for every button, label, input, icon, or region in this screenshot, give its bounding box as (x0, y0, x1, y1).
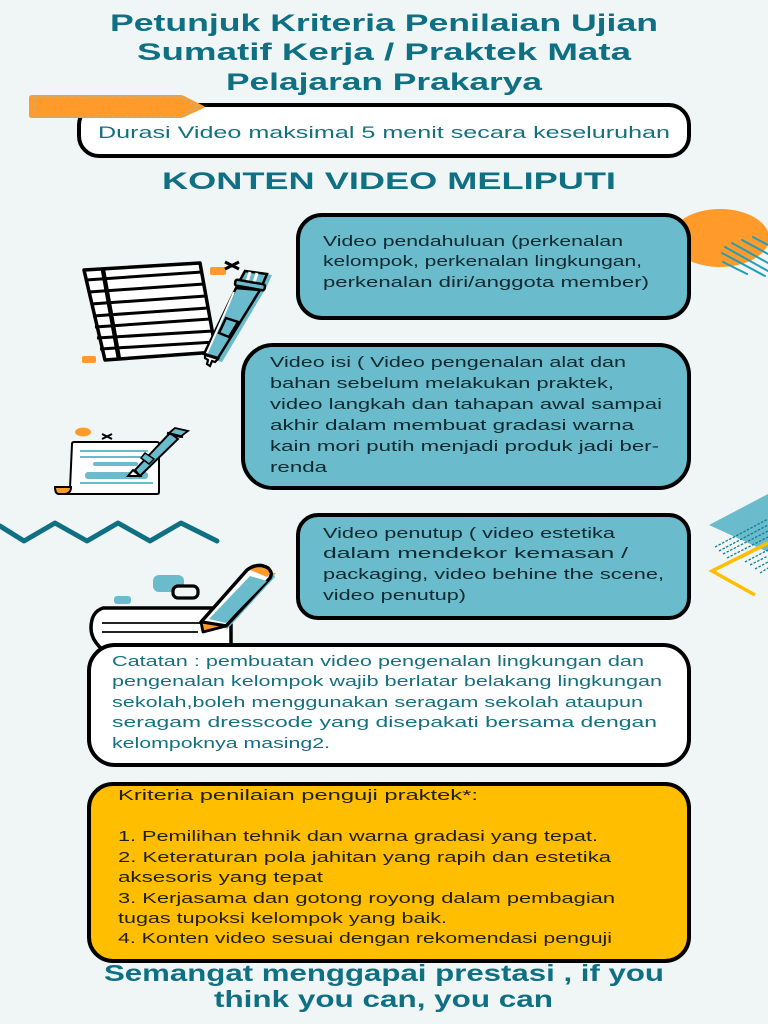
panel: note: seragam dresscode yang disepakati bersama dengan (112, 715, 657, 731)
panel: video duration: Durasi Video maksimal 5 menit secara keseluruhan (98, 124, 670, 142)
title: Pelajaran Prakarya (226, 69, 543, 96)
panel: intro video: perkenalan diri/anggota member) (323, 275, 649, 291)
panel: main video: bahan sebelum melakukan praktek, (270, 376, 614, 392)
icon: notebook and pen (82, 262, 272, 366)
closing message: think you can, you can (214, 986, 553, 1012)
icon: paper and pen (55, 428, 188, 494)
icon: note and pencil (91, 565, 276, 650)
panel: assessment criteria: Kriteria penilaian penguji praktek*: (118, 788, 478, 804)
decoration: zigzag line (0, 523, 217, 541)
panel: closing video: packaging, video behine the scene, (323, 567, 664, 583)
closing message: Semangat menggapai prestasi , if you (104, 960, 664, 986)
panel: intro video (298, 215, 689, 318)
panel: main video: kain mori putih menjadi produk jadi ber- (270, 439, 659, 455)
panel: closing video: video penutup) (323, 588, 466, 604)
panel: note: kelompoknya masing2. (112, 736, 330, 752)
panel: assessment criteria: 4. Konten video sesuai dengan rekomendasi penguji (118, 931, 612, 947)
panel: main video (243, 345, 689, 488)
panel: intro video: kelompok, perkenalan lingkungan, (323, 254, 642, 270)
panel: assessment criteria: 3. Kerjasama dan gotong royong dalam pembagian (118, 891, 615, 907)
decoration: orange circle with stripes (671, 209, 768, 276)
panel: assessment criteria: aksesoris yang tepat (118, 870, 323, 886)
panel: intro video: Video pendahuluan (perkenalan (323, 234, 623, 250)
panel: video duration (79, 105, 689, 156)
panel: main video: Video isi ( Video pengenalan alat dan (270, 355, 626, 371)
panel: closing video (298, 515, 689, 618)
panel: note: Catatan : pembuatan video pengenalan lingkungan dan (112, 654, 644, 670)
closing message (104, 960, 664, 1012)
panel: note (89, 645, 689, 765)
panel: note: sekolah,boleh menggunakan seragam sekolah ataupun (112, 695, 643, 711)
panel: closing video: Video penutup ( video estetika (323, 526, 616, 542)
title (110, 10, 658, 96)
panel: closing video: dalam mendekor kemasan / (323, 546, 630, 562)
panel: main video: akhir dalam membuat gradasi warna (270, 418, 635, 434)
heading: video content: KONTEN VIDEO MELIPUTI (162, 168, 616, 195)
panel: assessment criteria: tugas tupoksi kelompok yang baik. (118, 911, 447, 927)
panel: note: pengenalan kelompok wajib berlatar belakang lingkungan (112, 674, 662, 690)
panel: assessment criteria: 1. Pemilihan tehnik dan warna gradasi yang tepat. (118, 829, 598, 845)
title: Sumatif Kerja / Praktek Mata (137, 39, 632, 66)
title: Petunjuk Kriteria Penilaian Ujian (110, 10, 658, 37)
icon: orange ribbon (29, 95, 204, 118)
decoration: triangles and waves (709, 494, 768, 595)
panel: main video: video langkah dan tahapan awal sampai (270, 397, 662, 413)
panel: main video: renda (270, 460, 328, 476)
panel: assessment criteria (89, 784, 689, 961)
panel: assessment criteria: 2. Keteraturan pola jahitan yang rapih dan estetika (118, 850, 612, 866)
